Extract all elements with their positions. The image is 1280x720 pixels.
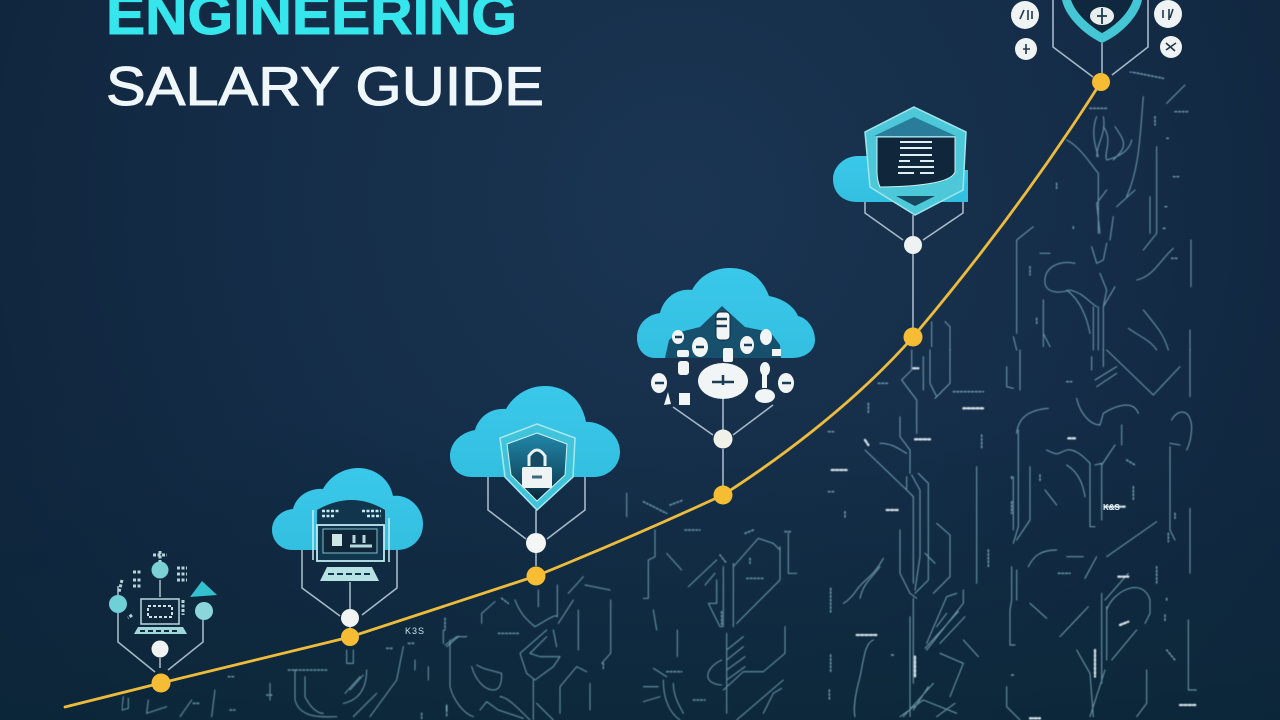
white node — [152, 640, 168, 658]
workstation icon — [313, 500, 389, 581]
connector lines — [865, 202, 963, 328]
white node — [526, 533, 546, 553]
white node — [714, 430, 732, 448]
white node — [341, 609, 359, 627]
white icon cluster — [651, 312, 794, 405]
triangle icon — [190, 581, 217, 597]
icon details — [655, 319, 791, 385]
title line: salary guide: SALARY GUIDE — [106, 55, 544, 117]
title — [106, 0, 544, 117]
white node — [904, 236, 922, 254]
step 1: laptop with teal nodes — [109, 551, 217, 672]
hexagon shield — [865, 107, 966, 215]
step 4: cloud with network of icons — [637, 268, 815, 486]
cloud — [450, 386, 620, 477]
cloud — [833, 156, 968, 202]
shield — [1062, 0, 1142, 43]
shield — [500, 424, 575, 510]
padlock — [522, 450, 552, 488]
step 6: top shield with satellites — [1011, 0, 1182, 77]
connector lines — [118, 580, 203, 672]
cloud — [637, 268, 815, 358]
brain icon — [1090, 7, 1114, 25]
curve milestone nodes — [152, 73, 1110, 692]
circuit board background traces — [122, 72, 1197, 720]
dark dome behind icons — [665, 306, 781, 358]
salary growth curve — [65, 82, 1101, 707]
step 2: cloud with workstation — [272, 468, 423, 630]
small label fragment: K&S — [1103, 503, 1121, 512]
teal circles — [109, 595, 127, 613]
satellite circles — [1011, 1, 1039, 29]
step 3: cloud with shield lock — [450, 386, 620, 566]
connector lines — [488, 477, 585, 566]
satellite glyphs — [1020, 9, 1176, 54]
small glyph icons — [119, 551, 187, 618]
cloud — [272, 468, 423, 550]
connector lines — [1053, 0, 1148, 77]
step 5: cloud with document hexagon — [833, 107, 968, 328]
connector lines — [302, 550, 397, 630]
connector lines — [673, 399, 773, 486]
small label fragment: K3S — [405, 626, 425, 636]
laptop icon — [134, 599, 187, 634]
document text lines — [898, 142, 934, 173]
